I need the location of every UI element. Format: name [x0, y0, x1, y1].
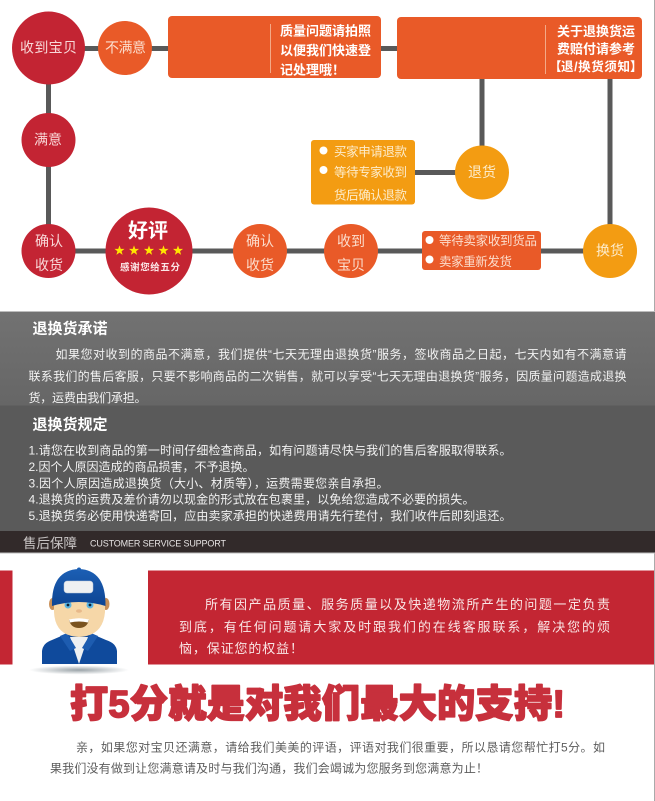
- callout: shipping cost note: [397, 17, 643, 79]
- step: confirm receipt red: 确认: [35, 233, 63, 249]
- rules list: 2.因个人原因造成的商品损害，不予退换。: [28, 459, 254, 474]
- panel: service guarantee: 所有因产品质量、服务质量以及快递物流所产生的问题一定负责: [205, 597, 610, 612]
- heading: return rules: 退换货规定: [32, 416, 108, 434]
- rules list: [28, 442, 512, 523]
- promise paragraph: 如果您对收到的商品不满意，我们提供“七天无理由退换货”服务，签收商品之日起，七天内如有不满意请: [56, 346, 626, 362]
- panel: return rules: [0, 406, 655, 532]
- step: exchange: 换货: [596, 242, 624, 258]
- callout: shipping cost note: 退/换货须知: [561, 59, 630, 74]
- rules list: 5.退换货务必使用快递寄回，应由卖家承担的快递费用请先行垫付，我们收件后即刻退还。: [28, 508, 512, 523]
- closing paragraph: [50, 740, 605, 776]
- step: exchange: [583, 224, 637, 278]
- rules list: 4.退换货的运费及差价请勿以现金的形式放在包裹里，以免给您造成不必要的损失。: [28, 492, 474, 506]
- callout: shipping cost note: 关于退换货运: [557, 24, 635, 39]
- callout: shipping cost note: 】: [630, 60, 643, 74]
- callout: shipping cost note: 【: [549, 60, 562, 74]
- heading: big slogan: 打5分就是对我们最大的支持!: [70, 684, 565, 726]
- step: not satisfied: 不满意: [105, 40, 146, 56]
- banner: customer service support: 售后保障: [23, 536, 77, 551]
- heading: return promise: 退换货承诺: [32, 320, 108, 338]
- exchange steps box: 卖家重新发货: [439, 254, 512, 269]
- callout: shipping cost note: 费赔付请参考: [557, 42, 635, 56]
- step: return: [455, 146, 509, 200]
- step: received goods: 收到宝贝: [20, 40, 77, 56]
- callout: quality problem: 记处理哦！: [280, 62, 345, 78]
- exchange steps box: 等待卖家收到货品: [439, 233, 537, 248]
- callout: quality problem: 以便我们快速登: [280, 43, 371, 58]
- promise paragraph: 货，运费由我们承担。: [28, 390, 146, 405]
- step: return: 退货: [468, 164, 496, 180]
- step: satisfied: 满意: [34, 132, 62, 148]
- refund steps box: [311, 140, 415, 204]
- exchange steps box: [422, 231, 541, 270]
- refund steps box: 等待专家收到: [334, 164, 407, 180]
- step: confirm receipt orange: 确认: [246, 233, 274, 249]
- closing paragraph: 果我们没有做到让您满意请及时与我们沟通，我们会竭诚为您服务到您满意为止！: [50, 760, 488, 776]
- icon: five stars: [114, 245, 183, 255]
- panel: return promise: [0, 311, 655, 406]
- promise paragraph: 联系我们的售后客服，只要不影响商品的二次销售，就可以享受“七天无理由退换货”服务，因质量问题造成退换: [28, 368, 626, 384]
- step: not satisfied: [98, 21, 152, 75]
- step: good review: 感谢您给五分: [120, 262, 180, 274]
- icon: customer service person: [29, 568, 129, 674]
- step: received goods orange: 收到: [337, 233, 365, 249]
- banner: customer service support: [0, 531, 655, 554]
- step: confirm receipt red: [22, 224, 76, 278]
- step: received goods orange: [324, 224, 378, 278]
- rules list: 1.请您在收到商品的第一时间仔细检查商品，如有问题请尽快与我们的售后客服取得联系。: [28, 442, 512, 458]
- banner: customer service support: CUSTOMER SERVICE SUPPORT: [90, 538, 226, 548]
- panel: service guarantee: [148, 570, 654, 664]
- panel: service guarantee: 到底，有任何问题请大家及时跟我们的在线客服联系，解决您的烦: [179, 620, 610, 634]
- flow connector lines: [46, 46, 612, 254]
- callout: quality problem: [168, 16, 381, 78]
- step: confirm receipt orange: 收货: [246, 257, 274, 273]
- step: confirm receipt red: 收货: [35, 257, 63, 273]
- rules list: 3.因个人原因造成退换货（大小、材质等），运费需要您亲自承担。: [28, 476, 388, 490]
- refund steps box: 货后确认退款: [334, 188, 407, 202]
- step: received goods orange: 宝贝: [337, 257, 365, 273]
- step: confirm receipt orange: [233, 224, 287, 278]
- red bar left: [0, 570, 12, 664]
- panel: service guarantee: 恼，保证您的权益！: [179, 641, 303, 656]
- promise paragraph: [28, 346, 626, 405]
- step: satisfied: [22, 113, 76, 167]
- step: good review: [106, 208, 192, 294]
- closing paragraph: 亲，如果您对宝贝还满意，请给我们美美的评语，评语对我们很重要，所以恳请您帮忙打5分。如: [76, 740, 605, 754]
- step: received goods: [12, 12, 85, 84]
- refund steps box: 买家申请退款: [334, 144, 407, 159]
- callout: quality problem: 质量问题请拍照: [280, 24, 371, 38]
- step: good review: 好评: [128, 220, 168, 242]
